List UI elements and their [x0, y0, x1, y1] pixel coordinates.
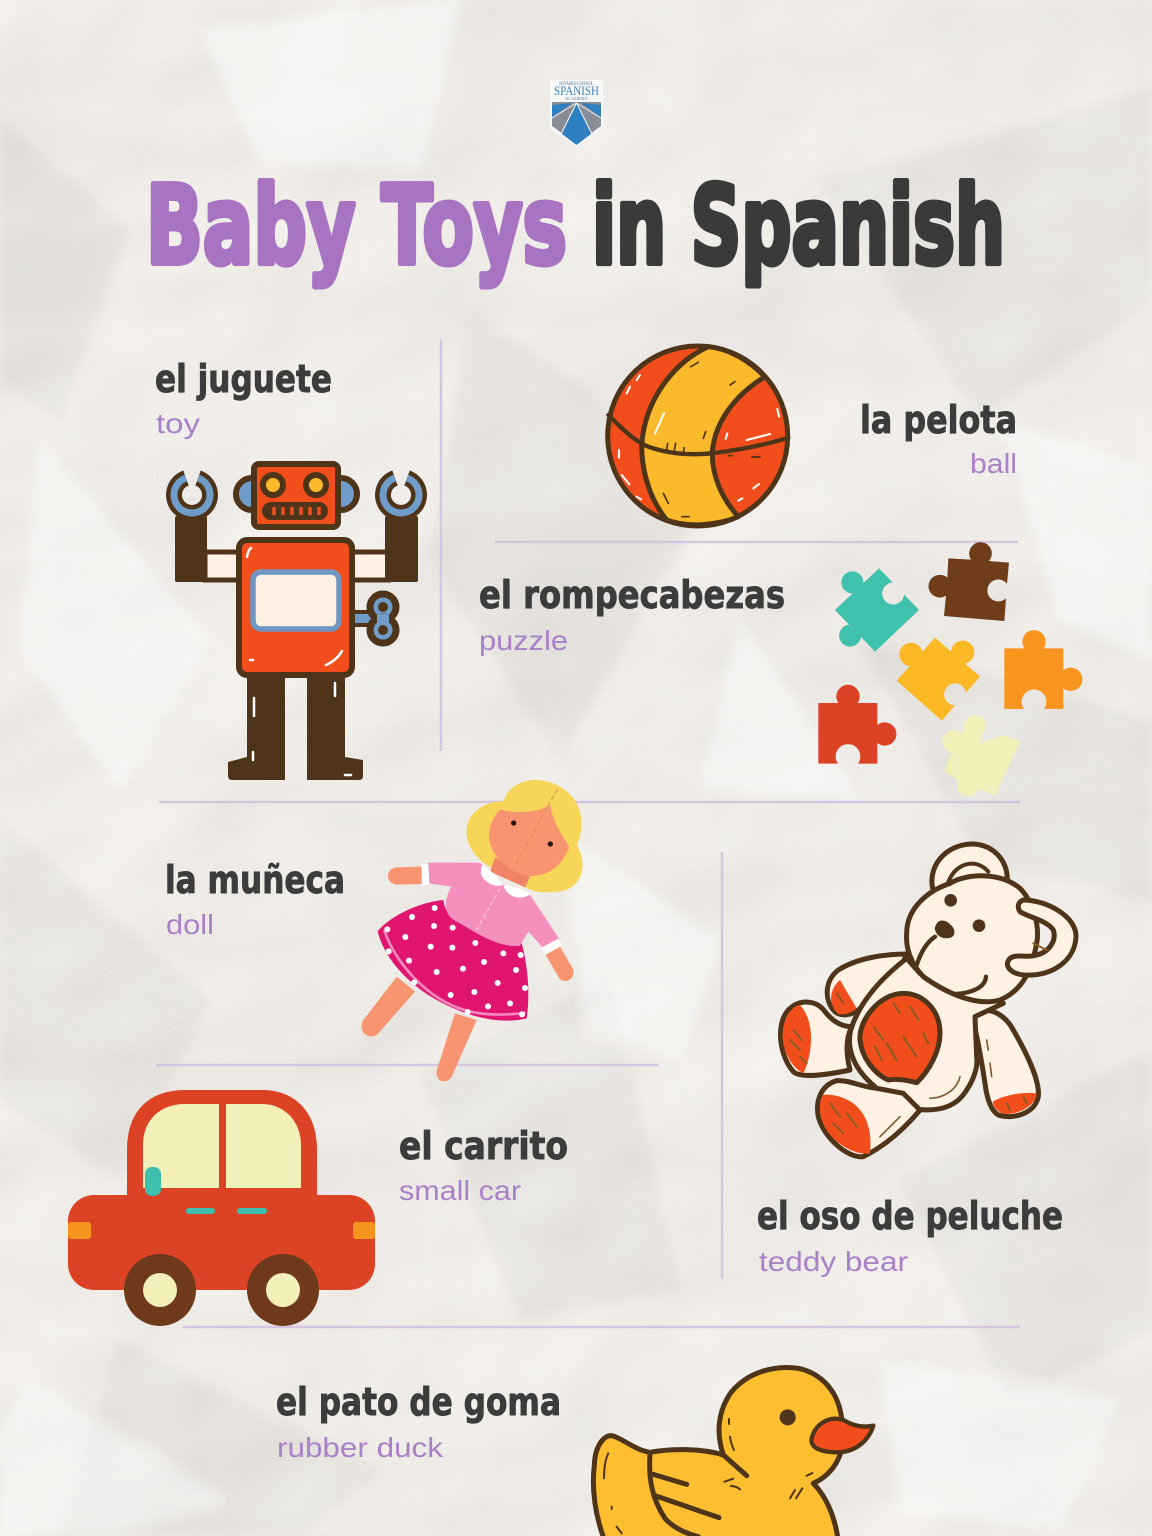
- icon: teddy bear: [780, 844, 1076, 1157]
- robot legs: [228, 675, 363, 780]
- robot body: [239, 540, 352, 675]
- label: el carrito / small car: el carrito: [399, 1124, 568, 1168]
- label: el juguete / toy: toy: [156, 408, 200, 439]
- doll skirt: [378, 900, 528, 1021]
- label: el pato de goma / rubber duck: [276, 1380, 561, 1463]
- label: la pelota / ball: [860, 398, 1017, 479]
- robot head: [254, 464, 338, 527]
- doll hair: [466, 780, 583, 892]
- label: el rompecabezas / puzzle: [479, 573, 785, 656]
- car cabin and windows: [127, 1090, 317, 1200]
- bear top ear: [932, 844, 1007, 893]
- duck body and head: [593, 1368, 842, 1536]
- bear fur marks: [790, 943, 1047, 1133]
- bear body: [849, 958, 1003, 1110]
- icon: ball: [608, 346, 788, 526]
- label: el oso de peluche / teddy bear: [757, 1194, 1063, 1277]
- bear foot left: [780, 1002, 852, 1075]
- label: el carrito / small car: [399, 1124, 568, 1206]
- label: el juguete / toy: el juguete: [155, 357, 332, 401]
- logo: Spanish academy shield: ACADEMY: [565, 96, 589, 101]
- doll arms: [388, 864, 573, 981]
- doll blouse: [428, 863, 560, 950]
- label: el pato de goma / rubber duck: rubber duck: [277, 1432, 444, 1463]
- duck wing lines: [650, 1453, 747, 1536]
- divider lines: [156, 340, 1020, 1327]
- bear belly patch: [860, 993, 940, 1083]
- car wheels: [124, 1254, 319, 1326]
- label: el rompecabezas / puzzle: el rompecabezas: [479, 573, 785, 617]
- logo: Spanish academy shield: [550, 80, 603, 147]
- label: la muñeca / doll: [165, 858, 345, 940]
- label: la muñeca / doll: la muñeca: [165, 858, 345, 902]
- doll legs: [362, 977, 477, 1082]
- label: la pelota / ball: la pelota: [860, 398, 1017, 442]
- title: Baby Toys: [146, 164, 567, 289]
- bear side ear: [1007, 900, 1076, 975]
- label: la muñeca / doll: doll: [166, 909, 214, 940]
- label: el oso de peluche / teddy bear: el oso de peluche: [757, 1194, 1063, 1238]
- icon: wind-up robot: [174, 464, 419, 780]
- bear arm: [973, 1008, 1038, 1117]
- icon: small car: [68, 1090, 375, 1326]
- robot ears: [236, 478, 357, 510]
- robot arms: [175, 516, 418, 582]
- label: el carrito / small car: small car: [399, 1175, 521, 1206]
- label: la pelota / ball: ball: [970, 448, 1017, 479]
- icon: doll: [362, 780, 583, 1082]
- duck eye: [780, 1409, 796, 1425]
- label: el rompecabezas / puzzle: puzzle: [479, 625, 568, 656]
- doll face: [489, 789, 569, 876]
- logo: Spanish academy shield: HOMESCHOOL: [559, 82, 594, 87]
- label: el oso de peluche / teddy bear: teddy bear: [759, 1246, 908, 1277]
- logo: Spanish academy shield: SPANISH: [554, 84, 599, 98]
- icon: puzzle pieces: [818, 542, 1082, 796]
- duck detail marks: [604, 1419, 812, 1533]
- label: el juguete / toy: [155, 357, 332, 439]
- car body: [68, 1195, 375, 1290]
- bear head: [907, 876, 1038, 1002]
- icon: rubber duck: [593, 1368, 873, 1536]
- robot wind-up key: [352, 594, 396, 643]
- doll neck and collar: [481, 857, 530, 898]
- car lights and handles: [68, 1167, 375, 1239]
- duck beak: [812, 1419, 873, 1452]
- bear back leg: [827, 954, 907, 1015]
- robot claws: [174, 478, 419, 513]
- bear foot lower: [817, 1081, 920, 1157]
- label: el pato de goma / rubber duck: el pato de goma: [276, 1380, 561, 1424]
